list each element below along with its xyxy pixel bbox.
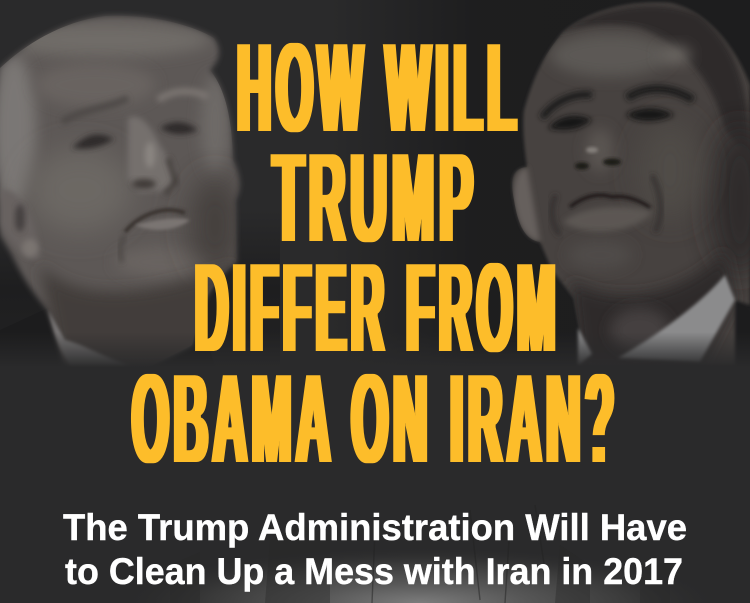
Obama collar	[578, 275, 735, 366]
Obama eyes and brows	[542, 89, 693, 130]
subtitle	[63, 507, 687, 592]
Obama nose	[575, 128, 621, 172]
subtitle line 2: to Clean Up a Mess with Iran in 2017	[65, 551, 683, 592]
Trump suit	[0, 308, 215, 366]
dark vignette behind Trump suit	[0, 210, 280, 368]
Trump head silhouette	[0, 16, 239, 366]
Obama suit	[700, 298, 750, 366]
fade beneath portraits	[0, 332, 750, 368]
Obama face shading	[514, 5, 750, 370]
Trump eyes and brows	[62, 91, 208, 149]
Trump mouth	[120, 210, 190, 262]
smoke and ruins photo	[200, 558, 640, 603]
Trump nose	[128, 117, 176, 194]
photo: Trump portrait	[0, 16, 241, 370]
Trump face shading	[0, 23, 241, 370]
dark vignette behind Obama	[330, 0, 750, 368]
subtitle line 1: The Trump Administration Will Have	[63, 507, 687, 548]
Obama mouth	[552, 175, 661, 269]
photo: Obama portrait	[512, 2, 750, 370]
Trump collar	[48, 312, 114, 363]
Obama head silhouette	[512, 2, 750, 366]
title	[132, 16, 619, 491]
